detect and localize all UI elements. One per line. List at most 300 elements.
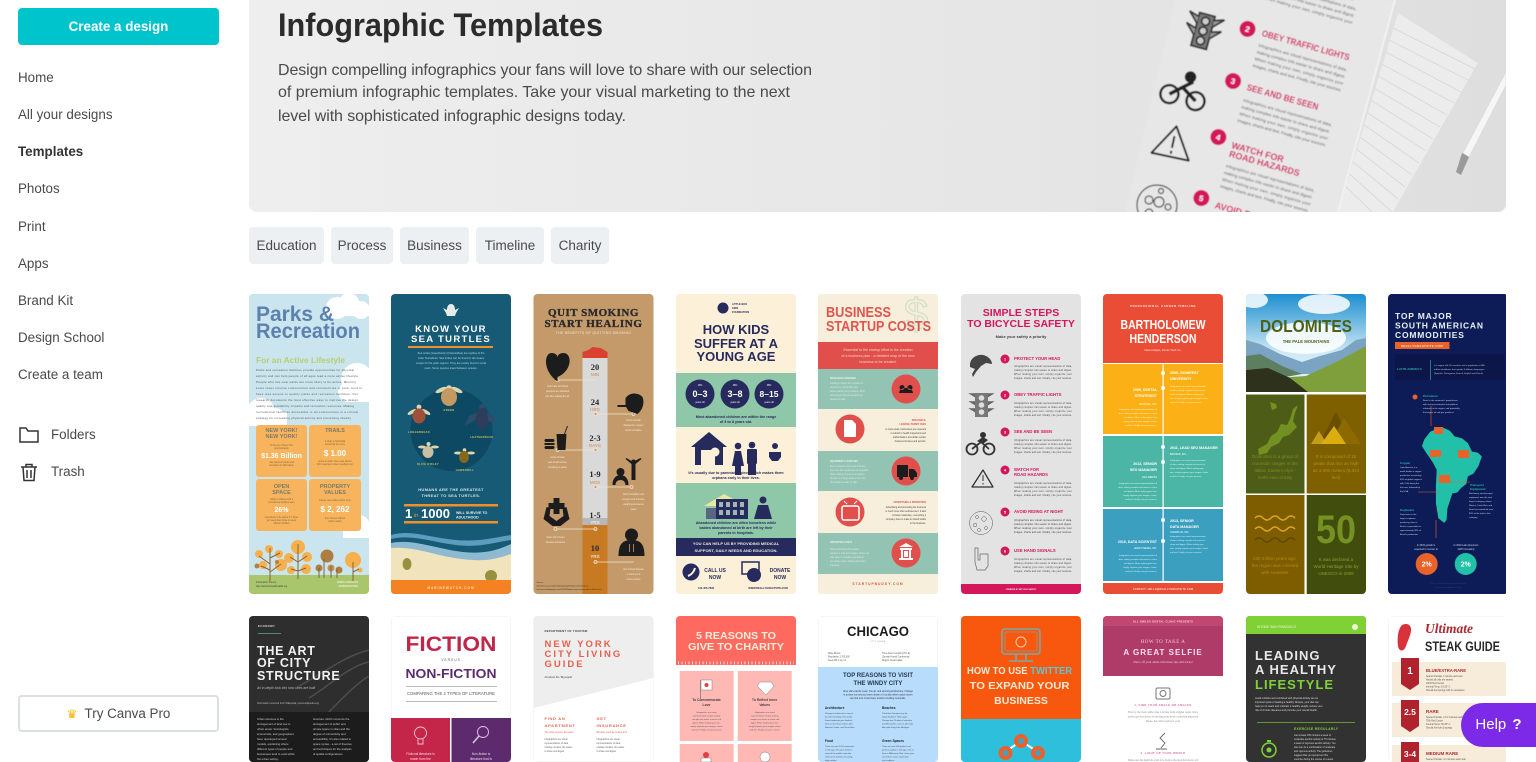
body text: accessibility. It's also related to (313, 737, 352, 741)
timeline body text: of data, making complex info easier to (1170, 463, 1206, 466)
stat tile: open space: Adults in Atlanta with 4 (270, 498, 294, 501)
icon: trash (21, 464, 37, 482)
expense: advertising: Advertising and promoting the business (886, 506, 927, 509)
card title: SEA TURTLES (411, 334, 491, 345)
nav item: photos: Photos (18, 181, 60, 196)
tile: values (738, 671, 792, 741)
card: quit smoking (534, 294, 654, 594)
poster: watch for road hazards: images, charts and text. Finally, cite your sources. (1220, 183, 1309, 213)
poster: step headings and text: images, charts and text. Finally, cite your sources. (1252, 63, 1342, 93)
panel: sidebar navigation (18, 8, 219, 732)
card: sea turtles (391, 294, 511, 594)
commodity notes: equipment was the next (1469, 496, 1492, 499)
commodity notes: Petroleum (1423, 394, 1438, 398)
tile: europe map: Italian Eastern Alps - (1254, 468, 1296, 473)
timeline column: 20 (591, 362, 599, 372)
intro band: business to be created. (859, 360, 897, 364)
card title: BUSINESS (826, 305, 891, 321)
tile: peaks (1307, 394, 1366, 494)
commodity notes: with Chile being the (1400, 482, 1420, 485)
card: dolomites (1240, 292, 1366, 594)
subtitle: COMPARING THE 2 TYPES OF LITERATURE (407, 691, 495, 696)
benefit captions: energy levels improve, (622, 498, 645, 501)
body text: have less access to quality parks and recreation facilities. Our (256, 392, 358, 396)
commodity notes: Soybeans (1400, 508, 1415, 512)
stat tile: open space: without facilities (273, 522, 290, 525)
expense: equipment (830, 456, 920, 486)
expense: licenses: business licenses and permits. (895, 440, 926, 443)
body text: arrangement of public and (313, 722, 346, 726)
poster: step headings and text: 2 (1244, 24, 1251, 35)
tile: seawater: the region was covered (1252, 563, 1299, 568)
clinic label: ALL SMILES DENTAL CLINIC PRESENTS (1133, 620, 1193, 624)
exercise section (1262, 727, 1339, 761)
statistic circles: expected to recover to (1414, 548, 1438, 551)
stat tile: property values: $ 2, 262 (321, 505, 350, 514)
latin america intro (1395, 354, 1505, 380)
card: parks and recreation: PARKS & WILDLIFE (337, 581, 358, 584)
tile: commemorate: To Commemorate (692, 698, 721, 702)
step 4: images, charts and text. Finally, cite your sources. (1014, 494, 1072, 497)
caption: orphans early in their lives. (712, 476, 760, 480)
chip: business: Business (407, 238, 462, 253)
card: reasons to give to charity (676, 616, 796, 762)
card: new york living guide (534, 616, 654, 762)
stat tile: open space (256, 479, 307, 531)
contact icons and text: NOW (709, 575, 721, 581)
doneness: rare: Seared Outside, 2 1/2 minutes each (1426, 716, 1463, 719)
age group band: 38% (767, 385, 771, 387)
benefit captions: and smell improve (548, 461, 568, 464)
latin america intro: million inhabitants that speaks 4 different languages: (1434, 368, 1485, 371)
exercise section: suggest that you spread out this (1294, 754, 1329, 757)
stat tile: new york (256, 425, 307, 477)
timeline column: YRS (590, 520, 600, 525)
step 1: images, charts and text. Finally, cite your sources. (1014, 377, 1072, 380)
step 2: When making your own, simply organize your (1014, 410, 1072, 413)
icon: folder (19, 427, 39, 443)
statistic: WILL SURVIVE TO (456, 511, 488, 515)
benefit captions: a non-smoker (626, 578, 641, 581)
twitter network (998, 734, 1045, 760)
commodity notes: the largest oil and gas producer (1423, 411, 1454, 414)
city stats: State Illinois (828, 652, 841, 655)
card title: SOUTH AMERICAN (1395, 320, 1484, 330)
subtitle: All about the 'Big Apple' (544, 675, 573, 679)
step 1: you've got that down, try moving your head or repositioning your (1128, 716, 1198, 718)
tile: europe map: mountain ranges in the (1252, 461, 1298, 466)
card title: Parks & (256, 303, 334, 326)
commodity notes: Latin America is a (1400, 466, 1418, 469)
card: leading a healthy lifestyle (1246, 616, 1366, 762)
nav item: trash: Trash (51, 464, 85, 479)
card: bicycle safety (961, 294, 1081, 594)
button: try canva pro: ♛ Try Canva Pro (67, 706, 170, 721)
intro text: except for the polar regions. They are mostly found in coral (416, 361, 486, 365)
doneness: blue rare: Should feel spongy with no resistance (1426, 689, 1465, 692)
body text: different types of people and (257, 747, 293, 751)
exercise section: moderate aerobic activity or 75 minutes (1294, 738, 1337, 741)
stat tile: open space: per week than those in areas (267, 519, 297, 522)
body text: urban areas. Sociologists, (257, 727, 289, 731)
age group band: years old (695, 401, 705, 404)
commodity notes: category. (1469, 516, 1478, 519)
expense: research: service is a critical first step (830, 386, 859, 389)
employer labels: ASIA MEDIAS (1142, 476, 1157, 479)
footer url: STARTUPBUDDY.COM (852, 582, 904, 586)
poster: moon icon (1136, 184, 1178, 212)
button: help (1461, 703, 1536, 747)
icon: face with cigarette (618, 393, 643, 414)
timeline body text: and text. Finally, cite your sources. (1125, 570, 1157, 573)
beach turtles (402, 558, 497, 582)
tile: values: and text. Finally, cite your sources (750, 728, 780, 732)
map of south america (1418, 406, 1482, 538)
poster: avoid riding (1192, 190, 1253, 212)
photo: white pen (1456, 72, 1506, 175)
timeline entries: 2012, SENIOR (1133, 462, 1157, 466)
timeline entries: 2005, GOHIREST (1170, 371, 1200, 375)
expense: equipment: Every business has needs that are (830, 465, 866, 468)
expense: research: needed to start. (830, 398, 846, 401)
stat tile: open space: OPEN (274, 484, 289, 490)
card title: KNOW YOUR (415, 324, 487, 335)
tile: peaks: peaks that rise as high (1313, 461, 1359, 466)
age group band: years old (764, 401, 774, 404)
card title: Ultimate (1425, 622, 1473, 637)
icon: heart (546, 353, 570, 382)
intro text: can find a lot of sanctuary amidst a bustling metropolis. (850, 697, 906, 700)
stat tile: open space: SPACE (272, 490, 291, 496)
clouds (247, 293, 373, 538)
icon: steak (1398, 624, 1411, 650)
column: get insurance: to share and digest (596, 750, 616, 753)
commodity notes: with strong economical and political (1423, 403, 1458, 406)
doneness: blue rare: Internal Temp: 10-25° C (1426, 686, 1451, 688)
section columns: the most stunning in the world. (825, 716, 853, 718)
body text: structure, which concerns the (313, 717, 350, 721)
statistic: ADULTHOOD (456, 516, 479, 520)
photo: bicycle safety poster (1125, 0, 1395, 227)
benefit captions: blood's breath (626, 419, 641, 422)
timeline entries: SEO MANAGER (1130, 468, 1157, 472)
tile: values: To Reflect Inner (752, 698, 778, 702)
body text: quality and availability of parks and recreation resources. Making (256, 404, 354, 408)
help band (676, 538, 796, 556)
section columns: Green Spaces (882, 739, 904, 743)
step 6: Infographics are visual representations of data, (1014, 558, 1072, 561)
intro text: important parts of leading a healthy lifestyle, your diet can (1255, 701, 1319, 704)
tile: fifty (1307, 495, 1366, 594)
footer text: CONTACT: HELLO@REALLYGREATSITE.COM (1133, 588, 1193, 591)
tile: seawater (1246, 495, 1304, 594)
nav item: templates: Templates (18, 144, 83, 159)
trees illustration (254, 540, 362, 581)
body text: activity and can help people of all ages lead a more active lifestyle. (256, 374, 359, 378)
tile: commemorate (680, 671, 734, 741)
timeline body text: simply organize your images, charts, (1123, 494, 1157, 497)
turtle circle diagram (407, 385, 495, 472)
label: DEPARTMENT OF TOURISM (544, 629, 588, 633)
blue band (1103, 509, 1223, 581)
chip: charity: Charity (559, 238, 601, 253)
step 5: Infographics are visual representations of data, (1014, 519, 1072, 522)
step 4: Infographics are visual representations of data, (1014, 482, 1072, 485)
timeline body text: Infographics are visual representations of (1119, 554, 1157, 557)
step 1: When making your own, simply organize your (1014, 373, 1072, 376)
info line: Information sourced from Wikipedia | www.wikipedia.org (257, 702, 320, 705)
step 6: USE HAND SIGNALS (1014, 548, 1056, 553)
commodity notes: approximately 30% of (1400, 529, 1421, 532)
body text: People who live near parks are more likely to be active. Minority (256, 380, 357, 384)
poster: step headings and text (1239, 20, 1350, 92)
intro band: Essential to the startup effort is the creation (843, 348, 913, 352)
card title: TO BICYCLE SAFETY (967, 318, 1075, 330)
column: find an apartment: representations of data, (544, 742, 569, 745)
poster: step headings and text: making complex info easier to share and digest. (1256, 49, 1346, 79)
card title: HOW TO USE TWITTER (967, 665, 1077, 677)
timeline body text: and text. Finally, cite your sources. (1170, 475, 1202, 478)
step 4: When making your own, simply organize your (1014, 490, 1072, 493)
timeline column: 1-5 (589, 510, 601, 520)
statistic: 1 (405, 506, 412, 521)
timeline column: MOS (590, 480, 600, 485)
subtitle: For an Active Lifestyle (256, 356, 346, 365)
commodity notes: Brazil's production. (1400, 533, 1419, 536)
benefit captions: disappears, oxygen (624, 424, 644, 427)
body text: recreational facilities accessible in all communities is a critical (256, 410, 358, 414)
timeline body text (1119, 385, 1208, 573)
source note: Source: https://www.reallygreatsite.com (1430, 582, 1466, 585)
doneness: blue rare (1392, 658, 1508, 696)
commodity notes: largest category, where (1469, 500, 1492, 503)
body text: arrangement of land use in (257, 722, 291, 726)
card: south american commodities (1388, 294, 1508, 594)
timeline column: 10 (591, 543, 599, 553)
step 5: images, charts and text. Finally, cite your sources. (1014, 531, 1072, 534)
timeline column: 24 (591, 397, 600, 407)
body text: space syntax - a set of theories (313, 742, 352, 746)
timeline column: YRS (590, 554, 600, 559)
card: business startup costs (818, 290, 938, 594)
tile: values: representations of data making (751, 714, 778, 718)
doneness: rare: 75% Red Center (1426, 720, 1443, 722)
expense: advertising: includes marketing - everything a (892, 514, 927, 517)
timeline body text: and text. Finally, cite your sources. (1125, 424, 1157, 427)
doneness: rare: RARE (1426, 709, 1439, 714)
label: ECONOMY (258, 624, 275, 628)
step 2: 2 (1004, 392, 1007, 398)
doneness: medium rare: 3-4 (1404, 749, 1416, 759)
family icons (691, 432, 781, 475)
yellow band (1103, 364, 1223, 434)
sources: http://www.huffingtonpost.com/2014/08/bodies-stops-smoking-after-1-300000.html (536, 588, 602, 591)
expense: advertising: ADVERTISING & PROMOTION (893, 501, 926, 504)
commodity notes: Brazil is the continent's powerhouse (1423, 399, 1459, 402)
poster: bicycle icon (1158, 70, 1206, 112)
card title: HOW TO TAKE A (1141, 640, 1185, 645)
card title: CHICAGO (847, 623, 909, 639)
card: ultimate steak guide: STEAK GUIDE (1425, 638, 1500, 654)
source note: http://www.reallygreatsite.org (1435, 586, 1461, 589)
step 6: When making your own, simply organize your (1014, 566, 1072, 569)
benefit captions: easier (630, 508, 637, 511)
chip: charity (551, 227, 609, 264)
hero description: of premium infographic templates. Take your visual marketing to the next (278, 84, 791, 101)
doneness: blue rare: Seared Outside, 1 minute each side (1426, 675, 1463, 678)
step 2: OBEY TRAFFIC LIGHTS (1014, 392, 1062, 397)
stat tile: new york: NEW YORK! (266, 434, 298, 440)
expense: operating (830, 538, 920, 568)
card: career timeline (1103, 294, 1223, 594)
step 5: 5 (1004, 510, 1007, 514)
step 1 (970, 354, 1072, 380)
expense: licenses: In most areas, businesses are expected (885, 428, 927, 431)
commodity notes: largest soybean (1400, 517, 1416, 520)
section columns: chefs at the forefront of cutting- (825, 756, 853, 758)
card title: STRUCTURE (257, 669, 340, 683)
poster: avoid riding: 5 (1198, 194, 1205, 204)
nav item: home: Home (18, 70, 54, 85)
expense: equipment: best met with equipment and supplies. (830, 469, 869, 472)
poster: see and be seen: images, charts and text. Finally, cite your sources. (1237, 118, 1327, 148)
timeline body text: and text. Finally, cite your sources. (1170, 551, 1202, 554)
employer labels: LEXICO MEDIA, INC. (1134, 547, 1157, 550)
step 2 (1128, 751, 1198, 762)
doneness: medium rare (1392, 742, 1508, 762)
benefit captions: breathing is easier (548, 466, 567, 469)
commodity notes: Copper (1400, 461, 1411, 465)
commodity notes: production accounting (1400, 474, 1422, 477)
tile: fifty: 50 (1316, 508, 1356, 552)
section heading: THE WINDY CITY (854, 681, 902, 687)
poster: watch for road hazards: WATCH FOR (1230, 140, 1285, 164)
chip: business (400, 227, 469, 264)
commodity notes: Equipment (1470, 487, 1486, 491)
commodity notes: Soya bean is the (1400, 513, 1417, 516)
chip: process: Process (338, 238, 386, 253)
tile: non-fiction: Non-fiction is (472, 752, 491, 756)
column: get insurance: Infographics are visual (596, 738, 620, 741)
hospital band: babies abandoned at birth are left by their (699, 526, 773, 530)
step 2: images, charts and text. Finally, cite your sources. (1014, 414, 1072, 417)
timeline body text: Infographics are visual representations (1170, 535, 1206, 538)
statistic (406, 509, 488, 518)
nav item: design school: Design School (18, 330, 104, 345)
doneness: blue rare: Almost all cells are seared (1426, 678, 1454, 682)
intro text: Alive with eclectic music, fine art, and stunning architecture, Chicago (843, 690, 914, 693)
column: get insurance: representations of data, (596, 742, 621, 745)
timeline body text: and text. Finally, cite your sources. (1125, 498, 1157, 501)
step 2 (971, 390, 1072, 417)
commodity notes: Transport (1470, 483, 1484, 487)
expense: licenses: authorizations and obtain certain (893, 436, 927, 439)
footer text: http://actionforhealthykids.org (256, 585, 288, 588)
contact icons and text: CALL US (704, 568, 726, 574)
tile: fifty: World Heritage Site by (1314, 564, 1359, 569)
card title: A HEALTHY (1255, 662, 1337, 677)
expense: operating: Start-up funding of the plans (830, 548, 860, 551)
icon: lamp (1156, 733, 1167, 749)
exercise section: and vigorous activity. The guidelines (1294, 750, 1333, 753)
age group band: Most abandoned children are within the range (696, 415, 776, 419)
icon: monitor (1002, 629, 1040, 661)
website badge (1395, 342, 1450, 349)
step 5 (970, 508, 1072, 534)
timeline entries: 2011, LEAD SEO MANAGER (1170, 446, 1218, 450)
card title: THE ART (257, 644, 316, 658)
benefit captions: coughing decreases (623, 503, 645, 506)
step 5: making complex info easier to share and digest. (1014, 523, 1072, 526)
expense: research: formal and informal research are (830, 394, 864, 397)
section columns: Some landmarks you shouldn't (825, 719, 853, 722)
timeline body text: data, making complex info easier to share (1119, 558, 1158, 561)
step 1: First try the basic selfie: take a picture from a higher angle. Once (1128, 711, 1199, 714)
benefit captions: lower risk of heart (546, 536, 565, 539)
body text: and techniques for the analysis (313, 747, 352, 751)
road texture (299, 650, 369, 712)
step 3: images, charts and text. Finally, cite your sources. (1014, 451, 1072, 454)
expense: operating: OPERATING COSTS (830, 541, 853, 544)
commodity notes: the USA. (1400, 490, 1409, 493)
tile: commemorate: representations of data making (693, 714, 720, 718)
step 6 (975, 546, 1072, 573)
card: fiction versus non-fiction (391, 616, 511, 762)
body text: some lower income communities and communities of color tend to (256, 386, 362, 390)
tile: fifty: It was declared a (1319, 557, 1353, 562)
footer text: Information Source: (256, 581, 277, 584)
card: how to take a great selfie: A GREAT SELFIE (1123, 648, 1203, 657)
commodity notes: influence in the region, and potentially (1423, 407, 1461, 410)
exercise section: Get at least 150 minutes a week of (1294, 734, 1331, 737)
step 3 (966, 428, 1072, 454)
threat statement: HUMANS ARE THE GREATEST (418, 487, 484, 492)
stat tile: open space: more likely to be active 3-7 times (265, 516, 299, 519)
turtle circle diagram: HAWKSBILL (456, 469, 474, 472)
sources: http://www.cancer.org/healthy/stayawayfromtobacco/smoking.asp (536, 584, 588, 588)
stat tile: property values: than homes without (325, 517, 345, 520)
section columns (825, 706, 914, 762)
step 2: Make sure the light hits your face from a direction that shows off (1128, 759, 1198, 762)
step 2: 2. LIGHT UP YOUR WORLD (1140, 751, 1186, 755)
stat tile: trails: TRAILS (325, 428, 345, 434)
turtle circle diagram: GREEN (444, 409, 454, 412)
timeline entries: 2009, DIGITAL (1133, 388, 1158, 392)
poster: see and be seen: Infographics are visual representations of data, (1243, 98, 1333, 127)
card: how to take a great selfie: Show off your smile with these tips and tricks! (1133, 660, 1193, 664)
stat tile: new york: NEW YORK! (266, 428, 298, 434)
age group band: 8–15 (760, 389, 779, 399)
intro text: reefs. Some species travel between oceans. (425, 366, 478, 370)
timeline body text: Infographics are visual representations (1170, 385, 1206, 388)
intro text: help you to reach and maintain a healthy weight, reduce your (1255, 705, 1323, 708)
website badge: REALLYGREATSITE.COM (1401, 344, 1443, 348)
stat tile: property values: parks nearby (328, 520, 342, 523)
card: ultimate steak guide (1388, 616, 1508, 762)
nav item: apps: Apps (18, 256, 49, 271)
body text: models, explaining where (257, 742, 289, 746)
subtitle: An in-depth look into how cities are built (256, 686, 316, 690)
step 6: images, charts and text. Finally, cite your sources. (1014, 570, 1072, 573)
beach and waves (391, 533, 511, 594)
timeline column: HRS (590, 407, 600, 412)
title: Infographic Templates (278, 7, 603, 43)
stat tile: property values: Homes near parks sell for up to (319, 499, 352, 502)
section columns: Architecture (825, 706, 845, 710)
latin america intro: is a region with 20 countries and a population of 588 (1434, 364, 1485, 367)
stat tile: new york: recreation in 2016 alone (269, 464, 295, 467)
expense: advertising: in the business. (910, 522, 926, 525)
